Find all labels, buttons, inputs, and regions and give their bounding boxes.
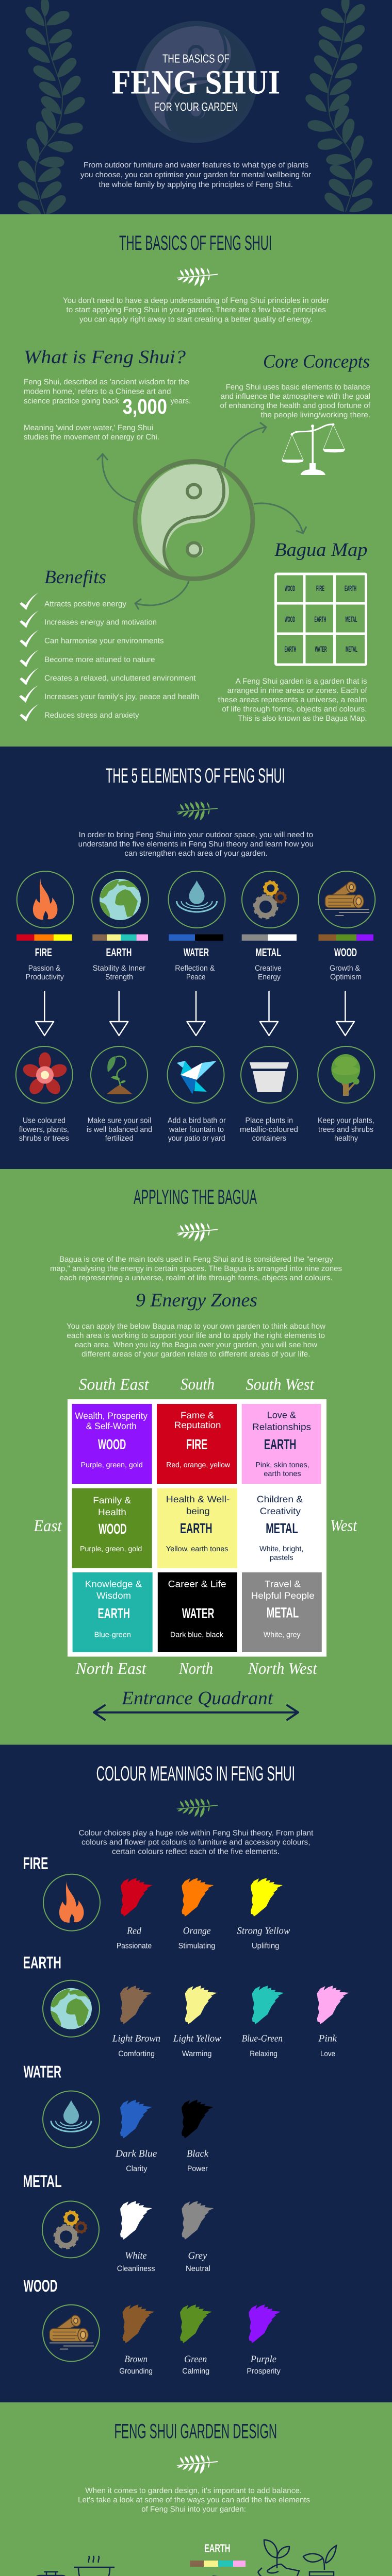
zone: knowledge: Wisdom	[96, 1590, 131, 1601]
block: core concepts: Core Concepts	[263, 351, 370, 372]
zone: love: earth tones	[264, 1470, 301, 1478]
block: benefits: Benefits	[44, 567, 106, 588]
arrow: entrance quadrant	[94, 1705, 298, 1720]
zone: family: Purple, green, gold	[80, 1545, 142, 1553]
action: soil: is well balanced and	[87, 1125, 152, 1134]
zone: love: Relationships	[252, 1422, 311, 1432]
group: earth colours: Light Brown	[112, 2033, 160, 2044]
element: fire: FIRE	[35, 946, 52, 959]
block: core concepts: of enhancing the health and good fortune of	[220, 401, 371, 410]
zone: children: METAL	[266, 1520, 298, 1536]
zone: knowledge: Blue-green	[94, 1631, 131, 1639]
energy zones grid	[68, 1399, 326, 1657]
group: earth colours: Love	[320, 2049, 335, 2058]
block: what is feng shui: What is Feng Shui?	[24, 347, 186, 368]
zone: love: EARTH	[264, 1436, 296, 1452]
element: metal: Creative	[255, 964, 282, 973]
group: earth colours	[23, 1953, 349, 2058]
panel: applying the bagua	[0, 1169, 392, 1744]
element: fire: Passion &	[28, 964, 60, 973]
group: water colours: Clarity	[126, 2164, 148, 2173]
group: wood colours: Prosperity	[247, 2367, 281, 2376]
group: wood colours: Green	[184, 2354, 207, 2365]
group: earth colours: Pink	[318, 2033, 337, 2044]
element: fire	[17, 871, 74, 981]
zone: health: Health & Well-	[166, 1494, 230, 1504]
block: bagua map: This is also known as the Bagua Map.	[238, 714, 367, 723]
block: bagua map: A Feng Shui garden is a garden that is	[236, 677, 367, 686]
intro text: each representing a universe, realm of life through forms, objects and colours.	[59, 1274, 333, 1282]
bagua map grid: METAL	[346, 615, 357, 624]
element: water: Reflection &	[175, 964, 215, 973]
intro text: Let's take a look at some of the ways you can add the five elements	[78, 2496, 310, 2504]
group: metal colours: METAL	[23, 2172, 62, 2191]
arrow: to what is feng shui	[97, 454, 136, 502]
element: metal: Energy	[258, 973, 281, 981]
group: earth ideas: EARTH	[204, 2542, 230, 2554]
group: earth colours: Comforting	[118, 2049, 155, 2058]
bagua map grid: WATER	[315, 645, 327, 654]
bagua map grid: EARTH	[285, 645, 296, 654]
group: metal colours: White	[125, 2250, 146, 2261]
zone: children: Creativity	[260, 1506, 301, 1516]
block: what is feng shui: modern home,' refers to a Chinese art and	[24, 387, 171, 396]
entrance quadrant label: Entrance Quadrant	[121, 1688, 274, 1709]
group: water colours: WATER	[24, 2062, 61, 2081]
panel: garden design	[0, 2402, 392, 2576]
zone: knowledge: EARTH	[98, 1605, 130, 1621]
zone: love: Love &	[267, 1410, 296, 1420]
decorative vine: left	[15, 0, 87, 218]
bagua map grid	[275, 573, 366, 665]
action: metallic pots: metallic-coloured	[240, 1125, 298, 1134]
block: benefits	[19, 567, 199, 721]
zone: health: being	[186, 1506, 210, 1516]
zone: health: EARTH	[180, 1520, 213, 1536]
group: fire colours: FIRE	[23, 1854, 48, 1873]
body text: different areas of your garden relate to different areas of your life.	[81, 1350, 311, 1359]
action: metallic pots: containers	[252, 1134, 286, 1143]
intro text: Colour choices play a huge role within Feng Shui theory. From plant	[79, 1829, 314, 1837]
block: what is feng shui: years.	[170, 397, 191, 405]
group: water colours	[24, 2062, 214, 2173]
intro text: certain colours reflect each of the five elements.	[112, 1847, 280, 1856]
intro text: Bagua is one of the main tools used in Feng Shui and is considered the "energy	[59, 1255, 333, 1264]
zone: travel: Helpful People	[251, 1590, 315, 1601]
zone: children: pastels	[270, 1554, 293, 1562]
group: metal colours: Grey	[188, 2250, 207, 2261]
element: metal	[242, 871, 299, 981]
group: wood colours: Calming	[182, 2367, 209, 2376]
group: wood colours	[24, 2276, 281, 2376]
block: core concepts: the people living/working there.	[261, 411, 370, 419]
panel: colour meanings	[0, 1744, 392, 2402]
icon: fire pit	[74, 2556, 115, 2576]
directions: East	[33, 1516, 62, 1535]
block: benefits: Become more attuned to nature	[44, 655, 155, 664]
group: fire colours: Passionate	[117, 1942, 152, 1951]
element: wood	[318, 871, 375, 981]
bagua map grid: FIRE	[316, 584, 324, 593]
icon: fern	[176, 1223, 218, 1242]
group: water colours: Power	[187, 2164, 208, 2173]
intro text: the whole family by applying the principles of Feng Shui.	[99, 180, 293, 189]
element: fire: Productivity	[25, 973, 64, 981]
zone: career: WATER	[182, 1605, 214, 1621]
group: fire colours: Strong Yellow	[237, 1926, 290, 1936]
intro text: You don't need to have a deep understanding of Feng Shui principles in order	[63, 296, 329, 305]
zone: family	[72, 1488, 152, 1568]
intro text: understand the five elements in Feng Shui theory and learn how you	[78, 840, 314, 849]
action: healthy trees: Keep your plants,	[318, 1116, 374, 1125]
action: healthy trees: healthy	[334, 1134, 358, 1143]
zone: children	[257, 1494, 303, 1562]
element: water: Peace	[186, 973, 205, 981]
block: what is feng shui: Meaning 'wind over water,' Feng Shui	[24, 423, 153, 432]
title: FENG SHUI	[112, 64, 280, 101]
zone: travel: METAL	[267, 1605, 299, 1621]
group: fire ideas	[35, 2556, 145, 2576]
bagua map grid: WOOD	[285, 584, 295, 593]
group: wood colours: Grounding	[119, 2367, 153, 2376]
body text: each area is working to support your life and to apply the right elements to	[67, 1331, 325, 1340]
title: THE BASICS OF	[162, 52, 230, 65]
panel: the basics of feng shui	[0, 214, 392, 747]
block: what is feng shui: science practice going back	[24, 397, 119, 405]
icon: soil	[258, 2540, 299, 2576]
group: fire colours	[23, 1854, 290, 1951]
zone: wealth: & Self-Worth	[86, 1421, 137, 1431]
action: soil	[87, 1046, 152, 1143]
zone: fame	[157, 1404, 237, 1484]
intro text: When it comes to garden design, it's important to add balance.	[85, 2486, 302, 2495]
group: earth colours: Blue-Green	[242, 2033, 283, 2044]
icon: fern	[176, 1799, 218, 1818]
zone: fame: Red, orange, yellow	[166, 1461, 230, 1469]
zone: love	[242, 1404, 321, 1484]
element: wood: WOOD	[334, 946, 357, 959]
zone: health: Yellow, earth tones	[166, 1545, 228, 1553]
zone: wealth: Purple, green, gold	[81, 1461, 143, 1469]
group: earth colours: Warming	[182, 2049, 211, 2058]
block: benefits: Attracts positive energy	[44, 600, 127, 608]
group: water colours: Black	[187, 2148, 209, 2159]
intro text	[50, 1255, 342, 1282]
block: bagua map: these areas represents a universe, a realm	[218, 696, 367, 704]
title	[112, 52, 280, 113]
directions: North	[178, 1659, 213, 1677]
block: core concepts: and influence the atmosphere with the goal	[221, 392, 370, 401]
icon: lantern	[35, 2572, 67, 2576]
group: metal colours: Cleanliness	[117, 2264, 155, 2273]
group: fire colours: Stimulating	[178, 1942, 215, 1951]
icon: fern	[176, 267, 218, 286]
sub heading: 9 Energy Zones	[136, 1290, 257, 1311]
zone: fame: Reputation	[174, 1420, 221, 1430]
zone: family: Health	[98, 1507, 126, 1517]
intro text: to start applying Feng Shui in your garden. There are a few basic principles	[66, 306, 326, 314]
directions: South West	[246, 1375, 315, 1394]
element: water	[168, 871, 225, 981]
action: soil: Make sure your soil	[88, 1116, 151, 1125]
heading: APPLYING THE BAGUA	[134, 1186, 257, 1209]
arrow: to bagua map	[254, 503, 306, 533]
group: earth colours: Light Yellow	[173, 2033, 221, 2044]
group: metal colours: Neutral	[186, 2264, 210, 2273]
zone: health	[157, 1488, 237, 1568]
block: benefits: Can harmonise your environments	[44, 637, 164, 646]
bagua map grid: EARTH	[315, 615, 326, 624]
zone: travel: White, grey	[264, 1631, 301, 1639]
icon: fern	[176, 802, 218, 820]
action: bird bath: Add a bird bath or	[168, 1116, 226, 1125]
intro text	[63, 296, 329, 324]
block: what is feng shui: Feng Shui, described as 'ancient wisdom for the	[24, 378, 189, 386]
group: wood colours: WOOD	[24, 2276, 58, 2295]
intro text: of Feng Shui into your garden:	[141, 2505, 246, 2514]
body text: You can apply the below Bagua map to your own garden to think about how	[67, 1322, 325, 1331]
heading: THE BASICS OF FENG SHUI	[119, 232, 272, 255]
directions: South	[181, 1375, 215, 1393]
action: soil: fertilized	[105, 1134, 134, 1143]
zone: knowledge: Knowledge &	[85, 1579, 142, 1589]
element: earth: EARTH	[106, 946, 132, 959]
element: earth	[92, 871, 149, 981]
zone: career: Dark blue, black	[170, 1631, 224, 1639]
zone: wealth: Wealth, Prosperity	[75, 1411, 148, 1421]
group: fire colours: Red	[126, 1926, 141, 1936]
block: benefits: Creates a relaxed, uncluttered environment	[44, 674, 196, 683]
block: bagua map	[218, 539, 367, 723]
block: core concepts: Feng Shui uses basic elements to balance	[226, 383, 370, 392]
action: healthy trees	[318, 1046, 374, 1143]
body text	[67, 1322, 325, 1359]
group: earth ideas	[190, 2540, 350, 2576]
yin yang	[135, 461, 253, 579]
intro text	[78, 2486, 310, 2514]
directions: South East	[79, 1375, 149, 1394]
block: bagua map: arranged in nine areas or zones. Each of	[227, 686, 367, 695]
zone: knowledge	[73, 1572, 153, 1652]
action: metallic pots	[240, 1046, 298, 1143]
group: wood colours: Brown	[124, 2354, 148, 2365]
block: benefits: Increases energy and motivation	[44, 618, 157, 627]
intro text: you choose, you can optimise your garden for mental wellbeing for	[80, 171, 311, 179]
group: water colours: Dark Blue	[115, 2148, 157, 2159]
zone: fame: Fame &	[181, 1410, 214, 1420]
intro text: From outdoor furniture and water features to what type of plants	[84, 161, 308, 170]
action: flowers: shrubs or trees	[19, 1134, 69, 1143]
icon: fern	[176, 2454, 218, 2474]
arrows: element to action	[36, 991, 354, 1036]
element: water: WATER	[184, 946, 209, 959]
zone: children: Children &	[257, 1494, 303, 1504]
element: metal: METAL	[255, 946, 281, 959]
group: fire colours: Uplifting	[252, 1942, 279, 1951]
action: bird bath	[167, 1046, 226, 1143]
zone: career: Career & Life	[168, 1579, 226, 1589]
block: benefits: Reduces stress and anxiety	[44, 711, 139, 720]
action: metallic pots: Place plants in	[246, 1116, 293, 1125]
block: core concepts	[220, 351, 371, 419]
zone: children: White, bright,	[259, 1545, 303, 1553]
bagua map grid: WOOD	[285, 615, 295, 624]
directions: West	[330, 1516, 357, 1534]
directions: North East	[75, 1659, 147, 1677]
zone: family: WOOD	[99, 1521, 127, 1537]
element: earth: Stability & Inner	[93, 964, 145, 973]
arrow: to core concepts	[225, 422, 266, 467]
intro text	[80, 161, 311, 189]
element: wood: Growth &	[330, 964, 360, 973]
zone: family: Family &	[93, 1495, 131, 1505]
block: benefits: Increases your family's joy, peace and health	[44, 692, 199, 701]
decorative vine: right	[303, 0, 375, 216]
intro text: can strengthen each area of your garden.	[124, 849, 268, 858]
block: what is feng shui	[24, 347, 191, 442]
action: healthy trees: trees and shrubs	[318, 1125, 373, 1134]
intro text	[79, 1829, 314, 1856]
yin yang watermark	[137, 23, 255, 141]
element: earth: Strength	[105, 973, 133, 981]
zone: career	[158, 1572, 237, 1652]
icon: scales	[282, 423, 345, 475]
panel: the 5 elements	[0, 747, 392, 1169]
block: what is feng shui: 3,000	[123, 395, 167, 418]
intro text: map," analysing the energy in certain spaces. The Bagua is arranged into nine zones	[50, 1264, 342, 1273]
body text: each area. When you lay the Bagua over your garden, you will see how	[75, 1341, 317, 1349]
icon: clay pot	[303, 2546, 336, 2576]
action: flowers	[16, 1046, 73, 1143]
action: bird bath: your patio or yard	[168, 1134, 225, 1143]
arrow: to benefits	[135, 581, 189, 609]
block: what is feng shui: studies the movement of energy or Chi.	[24, 433, 159, 442]
intro text: In order to bring Feng Shui into your outdoor space, you will need to	[79, 831, 313, 839]
directions	[33, 1375, 357, 1677]
intro text: colours and flower pot colours to furniture and accessory colours,	[81, 1838, 311, 1846]
block: bagua map: Bagua Map	[274, 539, 367, 561]
bagua map grid: METAL	[346, 645, 357, 654]
zone: fame: FIRE	[186, 1436, 207, 1452]
zone: wealth	[72, 1404, 152, 1484]
bagua map grid: EARTH	[345, 584, 356, 593]
block: bagua map: of life through forms, objects and colours.	[222, 705, 367, 714]
group: wood colours: Purple	[250, 2354, 276, 2365]
directions: North West	[248, 1659, 318, 1677]
group: fire colours: Orange	[183, 1926, 211, 1936]
element: wood: Optimism	[330, 973, 362, 981]
panel: header	[18, 0, 372, 214]
group: metal colours	[23, 2172, 214, 2273]
zone: travel	[242, 1572, 322, 1652]
title: FOR YOUR GARDEN	[154, 100, 238, 113]
intro text	[78, 831, 314, 858]
group: earth colours: EARTH	[23, 1953, 61, 1972]
action: bird bath: water fountain to	[169, 1125, 224, 1134]
group: earth colours: Relaxing	[250, 2049, 277, 2058]
action: flowers: Use coloured	[23, 1116, 66, 1125]
action: flowers: flowers, plants,	[19, 1125, 69, 1134]
intro text: you can apply right away to start creating a better quality of energy.	[79, 315, 313, 324]
zone: travel: Travel &	[265, 1579, 301, 1589]
zone: wealth: WOOD	[98, 1436, 126, 1452]
zone: love: Pink, skin tones,	[255, 1461, 309, 1469]
